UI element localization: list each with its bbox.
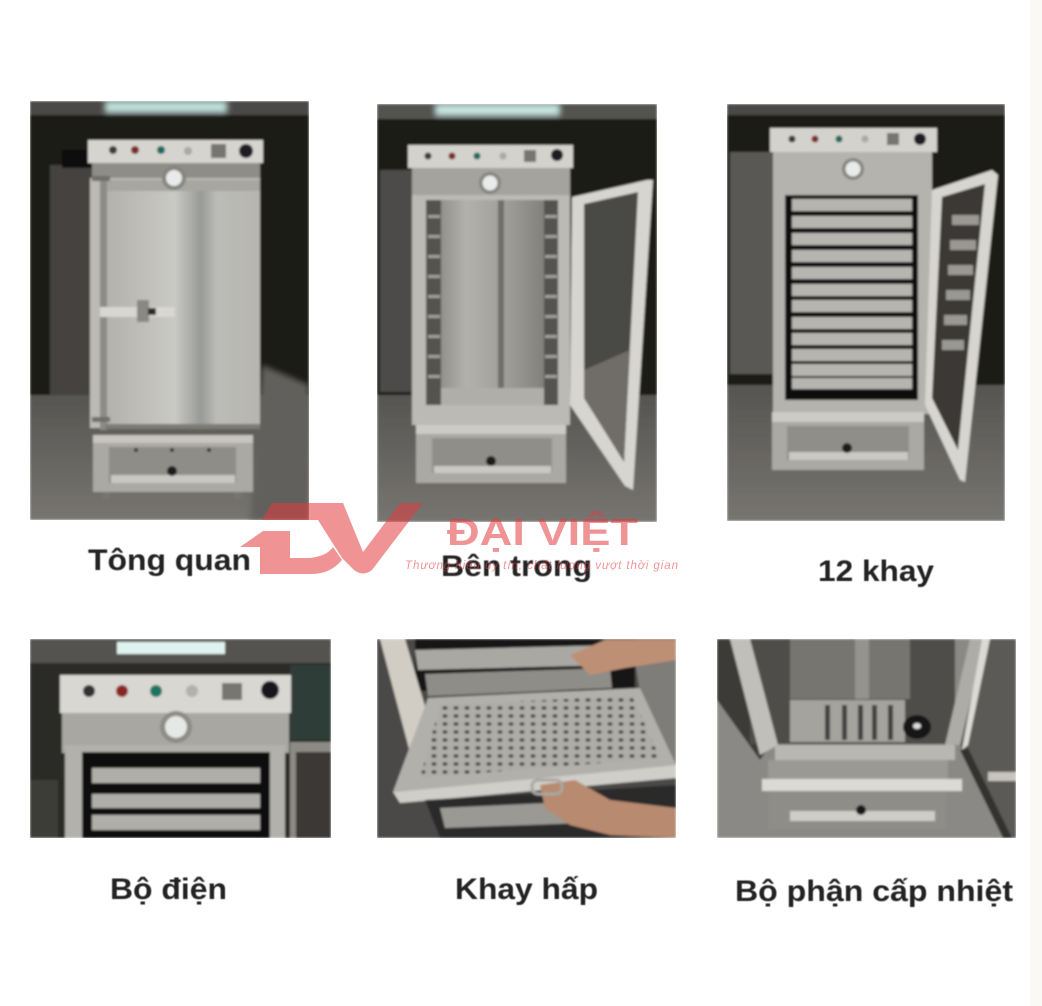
photo: inside view, empty cabinet with open door xyxy=(377,104,657,522)
logo tagline: Thương hiệu uy tín, chất lượng vượt thời gian xyxy=(405,560,678,572)
caption: overview: Tông quan xyxy=(88,544,251,577)
logo wordmark: ĐẠI VIỆT xyxy=(447,510,638,554)
caption: heating unit: Bộ phận cấp nhiệt xyxy=(735,875,1013,908)
watermark logo: Đại Việt xyxy=(240,503,678,574)
logo mark: DV xyxy=(240,503,423,574)
caption: steaming tray: Khay hấp xyxy=(455,873,598,906)
caption: electrical unit: Bộ điện xyxy=(110,873,227,906)
photo: steaming tray pulled out by hand xyxy=(377,639,676,838)
photo: cabinet loaded with 12 trays xyxy=(727,104,1005,521)
caption: inside: Bên trong xyxy=(441,550,592,583)
photo: overview, closed cabinet xyxy=(30,101,309,520)
caption: 12 trays: 12 khay xyxy=(818,555,934,588)
photo: heating unit at cabinet base xyxy=(717,639,1016,838)
photo: electrical control unit xyxy=(30,639,331,838)
